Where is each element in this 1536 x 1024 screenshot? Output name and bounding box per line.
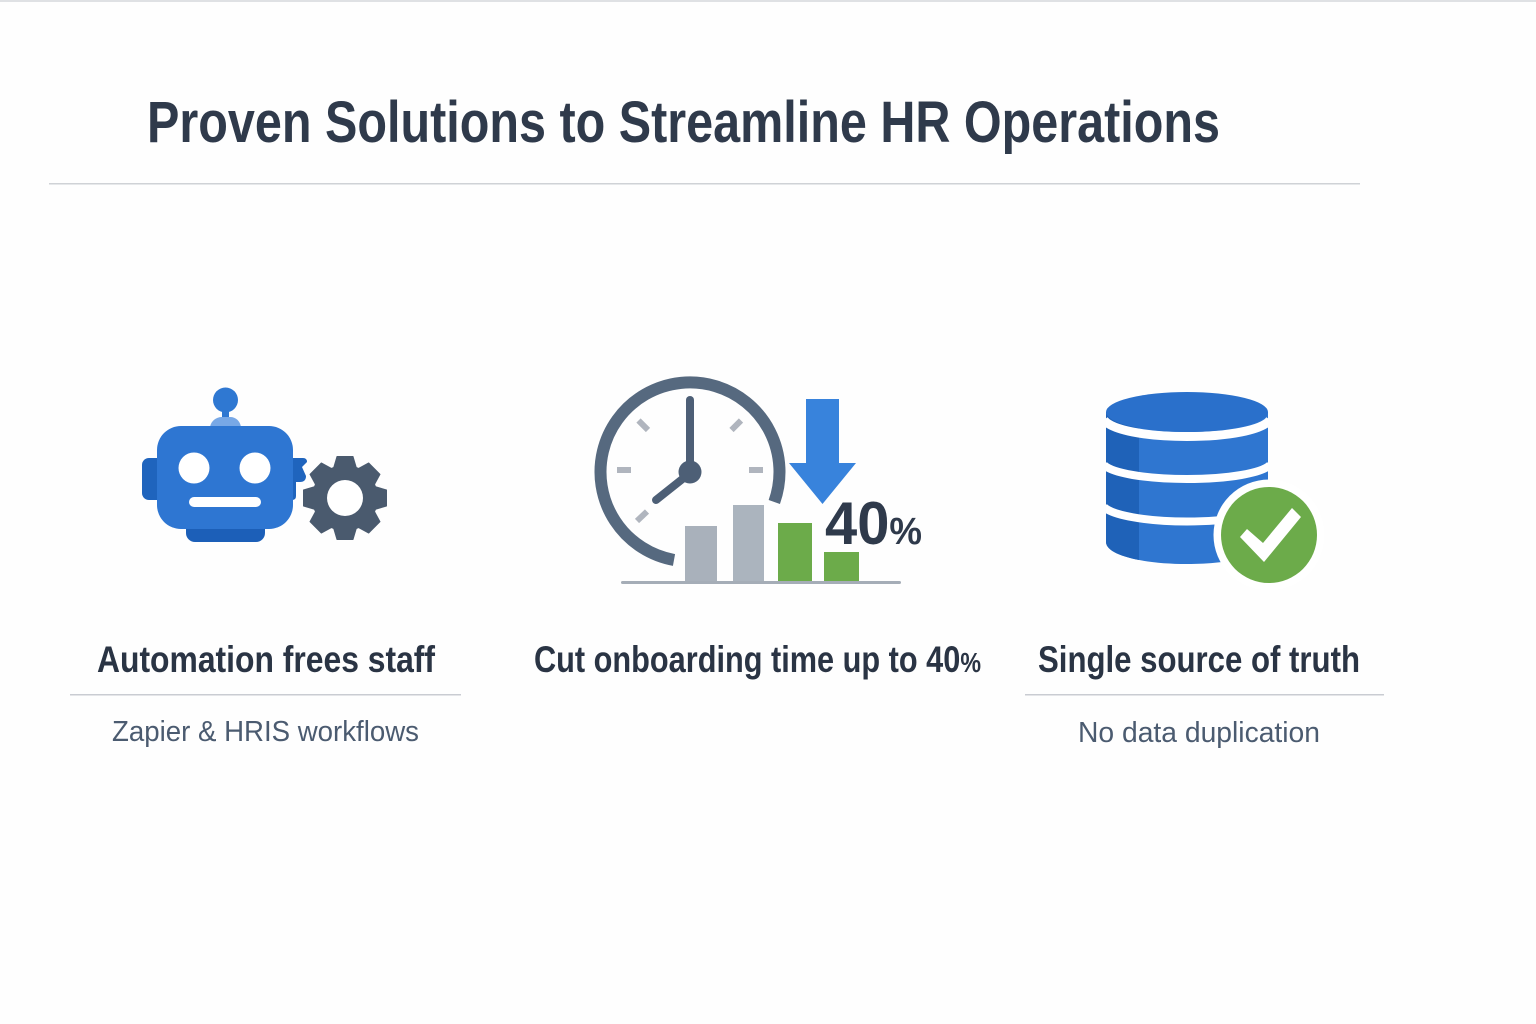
clock [600,382,779,560]
robot [142,388,307,542]
panel: automation [70,388,461,748]
bar chart [621,505,901,584]
icon: clock with bars and arrow [600,382,922,584]
stat: 40%: 40% [825,490,922,557]
subtext: automation: Zapier & HRIS workflows [112,716,419,748]
panel: onboarding [534,382,981,680]
panel: source of truth [1025,392,1384,749]
icon: check badge [1214,480,1324,590]
title: Proven Solutions to Streamline HR Operations [147,90,1220,155]
heading: onboarding: Cut onboarding time up to 40% [534,639,981,680]
icon: robot with gear [142,388,386,542]
arrow: down [789,399,856,504]
icon: gear [304,456,386,540]
database [1104,392,1270,567]
heading: automation: Automation frees staff [97,639,436,680]
icon: database with check [1104,392,1324,590]
heading: source of truth: Single source of truth [1038,639,1360,680]
subtext: source of truth: No data duplication [1078,717,1320,749]
